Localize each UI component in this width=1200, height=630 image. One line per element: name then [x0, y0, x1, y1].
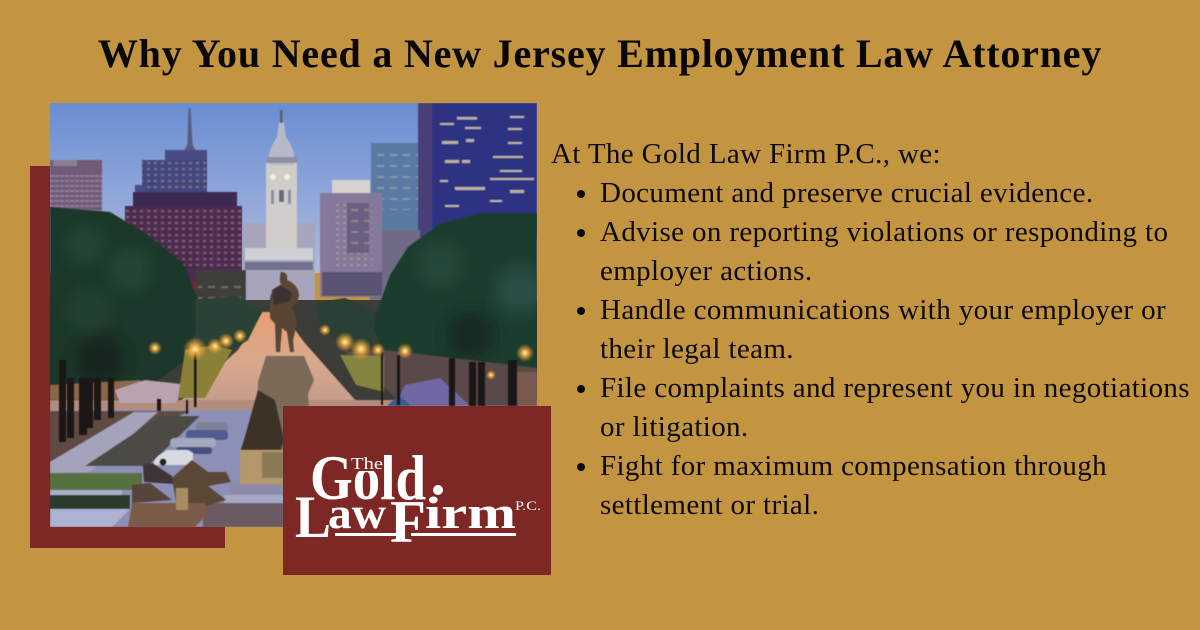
logo: The Gold Law Firm P.C. — [295, 442, 541, 555]
sky — [50, 103, 537, 273]
bullet 5 — [577, 450, 1107, 520]
logo: The Gold Law Firm P.C.: aw — [328, 489, 386, 538]
ground and parkway — [50, 300, 537, 410]
logo: The Gold Law Firm P.C.: F — [390, 489, 426, 555]
lion sculptures — [128, 460, 231, 527]
logo: The Gold Law Firm P.C.: irm — [425, 487, 516, 538]
bullet 3 — [577, 294, 1166, 364]
bullet 5: Fight for maximum compensation through — [600, 450, 1107, 482]
logo panel — [283, 406, 551, 575]
cars — [154, 422, 228, 466]
bullet 5: settlement or trial. — [600, 488, 819, 520]
bullet 3: Handle communications with your employer or — [600, 294, 1166, 326]
photo: city skyline and parkway at dusk — [50, 103, 537, 527]
title: Why You Need a New Jersey Employment Law Attorney — [98, 31, 1102, 76]
bullet 4: File complaints and represent you in negotiations — [600, 372, 1190, 404]
lower plaza and paths — [50, 410, 290, 527]
logo: The Gold Law Firm P.C.: The — [351, 454, 383, 473]
canopy texture left — [65, 225, 152, 386]
skyline buildings — [50, 103, 537, 308]
left side under canopy ground — [50, 345, 232, 403]
bullet 1: Document and preserve crucial evidence. — [600, 176, 1094, 208]
canopy texture right — [418, 243, 544, 359]
logo: The Gold Law Firm P.C.: L — [295, 484, 331, 550]
intro line: At The Gold Law Firm P.C., we: — [551, 138, 941, 170]
tree trunks — [59, 349, 517, 442]
right side under canopy ground — [340, 350, 537, 406]
bullet 2: Advise on reporting violations or responding to — [600, 216, 1168, 248]
bullet 3: their legal team. — [600, 332, 794, 364]
bullet 4: or litigation. — [600, 410, 749, 442]
statue and fountain monument — [203, 272, 314, 527]
maroon backing panel — [30, 166, 225, 548]
trees left — [50, 207, 262, 400]
logo: The Gold Law Firm P.C.: Gold — [310, 442, 426, 513]
logo: The Gold Law Firm P.C.: P.C. — [515, 498, 541, 513]
trees right — [315, 213, 537, 372]
text block: firm services — [551, 138, 1190, 520]
street lights — [148, 324, 534, 380]
bullet 2: employer actions. — [600, 254, 812, 286]
bullet 2 — [577, 216, 1168, 286]
avenue road — [170, 312, 364, 410]
bullet 4 — [577, 372, 1190, 442]
